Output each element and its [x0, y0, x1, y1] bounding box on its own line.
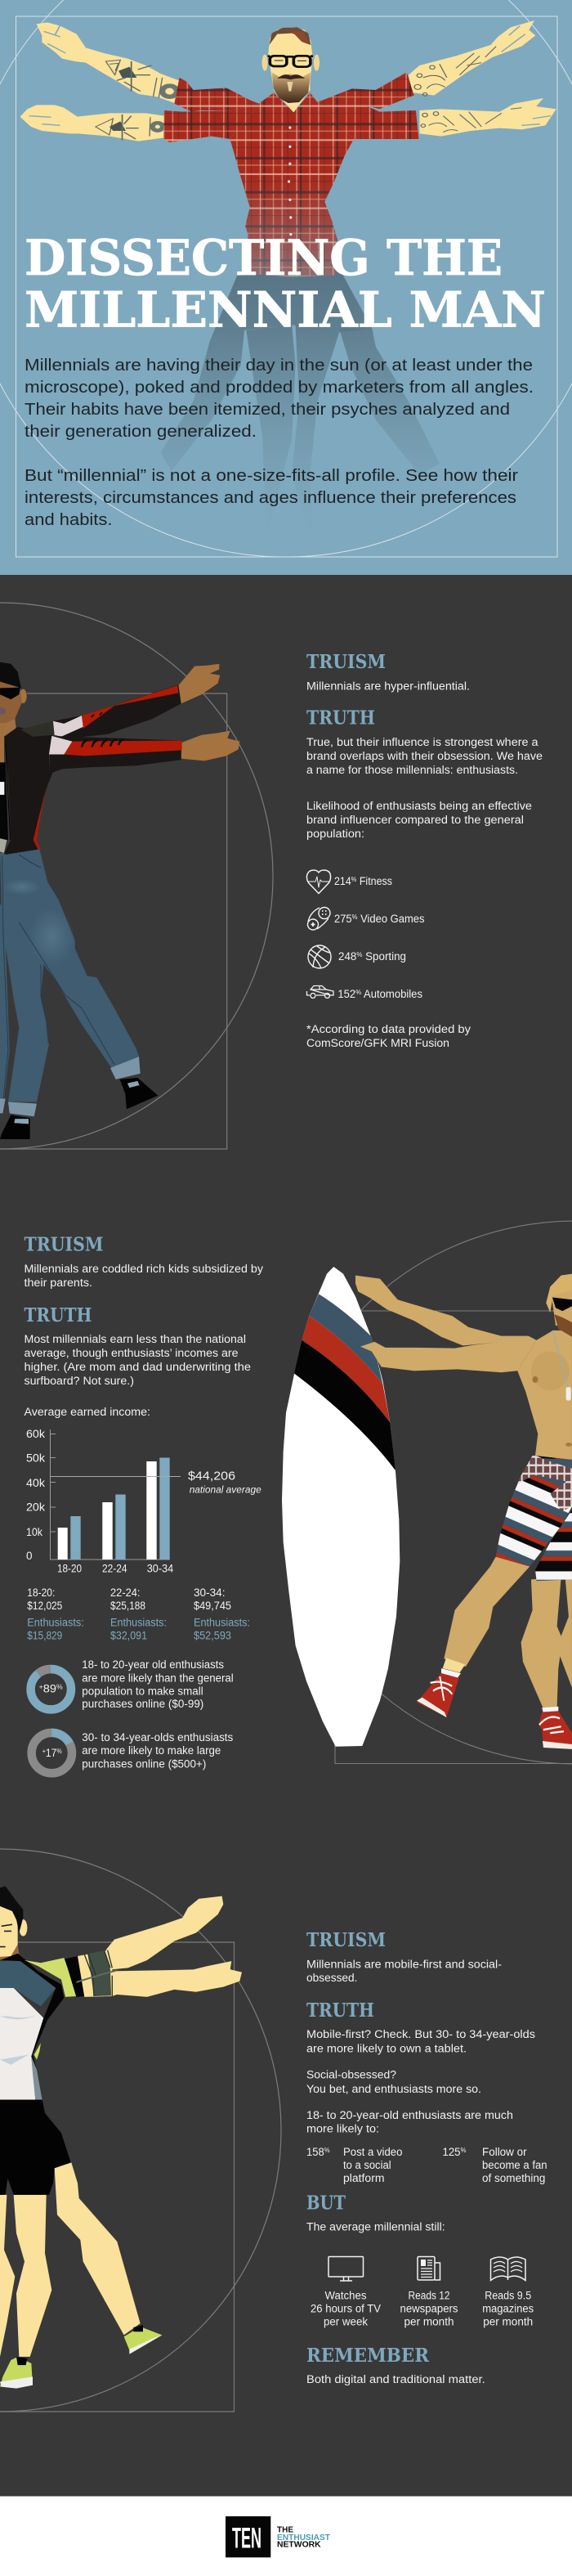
truism text — [25, 1263, 263, 1289]
jeans — [0, 849, 139, 1102]
income column: 30-34: 30-34: — [194, 1586, 226, 1599]
logo: The Enthusiast Network wordmark: THE — [277, 2526, 293, 2535]
icon: television — [328, 2257, 363, 2281]
jersey — [0, 1954, 78, 2100]
stat: sporting: Sporting — [362, 950, 406, 963]
stat: 158 percent: % — [324, 2147, 330, 2154]
title: DISSECTING THE — [25, 230, 503, 287]
caption: television: Watches — [325, 2290, 367, 2301]
footer — [0, 2496, 572, 2576]
panel: income — [23, 1221, 572, 1773]
remember text: Both digital and traditional matter. — [306, 2373, 485, 2385]
truism text: obsessed. — [306, 1972, 358, 1984]
illustration: tattooed man in plaid shirt — [20, 20, 556, 276]
frame circle and square — [0, 1849, 281, 2412]
stat: 158 percent: to a social — [343, 2159, 391, 2171]
donut text: small purchases: population to make small — [82, 1685, 203, 1698]
income column: 22-24: $25,188 — [110, 1600, 145, 1612]
income column: 18-20: $12,025 — [27, 1600, 62, 1612]
national average label: national average — [190, 1483, 261, 1495]
income column: 18-20 — [27, 1586, 84, 1642]
surfboard — [282, 1267, 400, 1747]
caption: magazines: magazines — [482, 2303, 534, 2314]
jeans cuffs — [0, 1057, 141, 1116]
legs — [444, 1557, 572, 1708]
arms and hands — [106, 1896, 242, 1997]
national average label — [188, 1469, 261, 1495]
donut chart: 89 percent: % — [56, 1683, 63, 1691]
icon: heart with pulse — [306, 870, 331, 893]
axis labels: 40k — [26, 1477, 45, 1489]
truth text: 18- to 20-year-old enthusiasts are much — [306, 2109, 513, 2121]
stat: video games: % — [352, 913, 358, 921]
head with sunglasses and beard — [546, 1274, 572, 1337]
truth text: are more likely to own a tablet. — [306, 2043, 467, 2054]
upper sleeve — [20, 684, 181, 739]
head — [0, 1886, 27, 1960]
stat: fitness: % — [351, 876, 356, 883]
stat: video games: Video Games — [358, 913, 425, 925]
truism text: their parents. — [25, 1277, 92, 1289]
icon: open magazine — [490, 2257, 525, 2280]
caption: television — [311, 2290, 381, 2327]
stat: 158 percent — [306, 2146, 402, 2184]
but text: The average millennial still: — [306, 2221, 445, 2233]
head with glasses and beard — [262, 27, 320, 112]
shoes — [0, 1078, 158, 1139]
panel: enthusiasts influencers — [0, 603, 543, 1149]
logo: The Enthusiast Network wordmark: ENTHUSIAST — [277, 2533, 330, 2542]
axis labels: 0 — [26, 1550, 33, 1562]
income column: 18-20: 18-20: — [27, 1586, 55, 1599]
likelihood text: Likelihood of enthusiasts being an effective — [306, 800, 532, 812]
shirt buttons — [288, 126, 292, 236]
stat: sporting: % — [356, 951, 362, 958]
illustration: man in black jacket and jeans — [0, 662, 239, 1139]
heading: remember: REMEMBER — [306, 2345, 430, 2367]
truth text: higher. (Are mom and dad underwriting the — [25, 1361, 251, 1373]
truth text — [306, 2028, 535, 2134]
sock and red sneakers — [417, 1658, 572, 1749]
stat: 125 percent: 125 — [443, 2146, 461, 2158]
stat: 125 percent: % — [461, 2147, 466, 2154]
vitruvian circle and square frame — [0, 0, 572, 557]
footnote — [306, 1023, 471, 1049]
lower sleeve — [49, 736, 182, 774]
logo: The Enthusiast Network wordmark: NETWORK — [277, 2541, 321, 2550]
frame circle and square — [286, 1221, 572, 1764]
truism text — [306, 1958, 502, 1984]
donut text: large purchases: purchases online ($500+) — [82, 1758, 206, 1770]
stat: 158 percent: platform — [343, 2172, 384, 2184]
intro text: interests, circumstances and ages influence their preferences — [25, 489, 516, 507]
axis labels: 22-24 — [102, 1562, 127, 1575]
icon: newspaper — [418, 2257, 440, 2280]
truth text: a name for those millennials: enthusiasts. — [306, 764, 518, 776]
stat: video games: 275 — [334, 913, 353, 925]
caption: magazines: per month — [483, 2316, 533, 2327]
stat: fitness: 214 — [334, 875, 353, 887]
income column: 18-20: $15,829 — [27, 1629, 62, 1642]
striped shorts — [496, 1456, 572, 1581]
chart axes — [51, 1429, 170, 1560]
income column: 22-24: $32,091 — [110, 1629, 147, 1642]
intro text: Millennials are having their day in the sun (or at least under the — [25, 357, 533, 375]
stat: 125 percent: of something — [482, 2172, 545, 2184]
bar chart: average earned income — [26, 1428, 261, 1575]
legs — [0, 2162, 141, 2357]
finger gaps — [29, 22, 551, 125]
footnote: *According to data provided by — [306, 1023, 471, 1035]
truism text: Millennials are coddled rich kids subsidized by — [25, 1263, 263, 1275]
national average line — [51, 1475, 181, 1477]
stat: 158 percent: 158 — [306, 2146, 325, 2158]
income column: 22-24 — [110, 1586, 167, 1642]
intro text: their generation generalized. — [25, 423, 257, 441]
tattoos — [96, 47, 521, 141]
truth text: Mobile-first? Check. But 30- to 34-year-olds — [306, 2028, 535, 2040]
chest detail and dog tag — [531, 1331, 572, 1447]
income column: 22-24: 22-24: — [110, 1586, 141, 1599]
plaid shirt — [163, 72, 418, 276]
icon: game controller — [307, 908, 330, 930]
income column: 30-34: Enthusiasts: — [194, 1616, 250, 1629]
caption: newspapers: Reads 12 — [409, 2290, 449, 2301]
truth text: average, though enthusiasts’ incomes are — [25, 1347, 239, 1359]
logo: TEN mark — [226, 2516, 270, 2557]
donut chart: 17 percent: % — [56, 1748, 62, 1755]
caption: television: per week — [324, 2316, 368, 2327]
income column: 30-34 — [194, 1586, 250, 1642]
donut chart: 17 percent: 17 — [46, 1747, 56, 1759]
donut chart: 89 percent: + — [39, 1683, 43, 1691]
heading: truism: TRUISM — [25, 1233, 103, 1256]
heading: but: BUT — [306, 2192, 346, 2215]
intro text — [25, 357, 534, 529]
truth text: True, but their influence is strongest where a — [306, 736, 538, 748]
logo: The Enthusiast Network wordmark — [277, 2526, 330, 2550]
title — [25, 230, 546, 339]
stat: automobiles: 152 — [337, 988, 356, 1000]
caption: newspapers: newspapers — [400, 2303, 458, 2314]
caption: newspapers: per month — [404, 2316, 454, 2327]
lime sneakers — [0, 2325, 162, 2389]
heading: truth: TRUTH — [25, 1304, 92, 1326]
intro text: Their habits have been itemized, their psyches analyzed and — [25, 401, 510, 419]
truth text: more likely to: — [306, 2123, 379, 2134]
jacket — [0, 727, 53, 855]
truth text — [25, 1333, 251, 1387]
donut text: small purchases: 18- to 20-year old enthusiasts — [82, 1658, 224, 1671]
truth text: You bet, and enthusiasts more so. — [306, 2083, 481, 2095]
likelihood text: population: — [306, 828, 364, 840]
national average label: $44,206 — [188, 1469, 235, 1483]
stat: 125 percent: Follow or — [482, 2146, 527, 2158]
donut chart: 89 percent — [23, 1661, 79, 1717]
caption: magazines — [482, 2290, 534, 2327]
truth text: surfboard? Not sure.) — [25, 1375, 134, 1387]
donut text: large purchases — [82, 1731, 234, 1770]
heading: truth: TRUTH — [306, 1999, 374, 2022]
donut text: small purchases — [82, 1658, 234, 1710]
frame circle and square — [0, 603, 273, 1149]
axis labels: 30-34 — [147, 1562, 174, 1575]
truth text: Social-obsessed? — [306, 2069, 396, 2080]
axis labels: 60k — [26, 1428, 45, 1440]
intro text: microscope), poked and prodded by marketers from all angles. — [25, 379, 534, 397]
truth text: Most millennials earn less than the national — [25, 1333, 246, 1345]
stat: 125 percent — [443, 2146, 547, 2184]
head — [0, 662, 27, 762]
title: MILLENNIAL MAN — [25, 281, 546, 339]
caption: television: 26 hours of TV — [311, 2303, 381, 2314]
black shorts — [0, 2100, 71, 2195]
arms — [20, 20, 556, 141]
income column: 30-34: $52,593 — [194, 1629, 231, 1642]
axis labels: 10k — [26, 1526, 42, 1538]
likelihood text: brand influencer compared to the general — [306, 814, 524, 826]
truth text — [306, 736, 543, 776]
bars: general population — [58, 1461, 157, 1560]
heading: truism: TRUISM — [306, 1929, 386, 1951]
axis labels — [26, 1428, 174, 1575]
chart heading: Average earned income: — [25, 1406, 150, 1418]
hands — [178, 664, 239, 761]
logo: TEN mark: TEN — [232, 2523, 261, 2555]
panel: hero introduction — [0, 0, 572, 575]
income column: 18-20: Enthusiasts: — [27, 1616, 84, 1629]
donut chart: 89 percent: 89 — [43, 1683, 56, 1694]
donut chart: 17 percent — [32, 1733, 72, 1773]
bars: enthusiasts — [70, 1457, 170, 1560]
stat: fitness: Fitness — [356, 875, 392, 887]
faded legs — [160, 268, 440, 548]
donut text: large purchases: 30- to 34-year-olds enthusiasts — [82, 1731, 234, 1744]
intro text: But “millennial” is not a one-size-fits-all profile. See how their — [25, 467, 518, 485]
stat: sporting: 248 — [338, 950, 357, 963]
banded sleeve — [65, 1950, 117, 1997]
likelihood text — [306, 800, 532, 840]
donut text: large purchases: are more likely to make large — [82, 1744, 221, 1757]
heading: truism: TRUISM — [306, 651, 386, 673]
donut text: small purchases: purchases online ($0-99) — [82, 1698, 203, 1710]
donut text: small purchases: are more likely than the general — [82, 1672, 234, 1685]
truism text: Millennials are mobile-first and social- — [306, 1958, 502, 1971]
illustration: surfer with surfboard — [282, 1267, 572, 1749]
axis labels: 18-20 — [57, 1562, 82, 1575]
stat: automobiles: Automobiles — [361, 988, 422, 1000]
intro text: and habits. — [25, 511, 113, 529]
footnote: ComScore/GFK MRI Fusion — [306, 1037, 449, 1049]
stat: 158 percent: Post a video — [343, 2146, 402, 2158]
donut chart: 17 percent: + — [42, 1748, 46, 1755]
truism text: Millennials are hyper-influential. — [306, 680, 470, 692]
income column: 30-34: $49,745 — [194, 1600, 231, 1612]
caption: newspapers — [400, 2290, 458, 2327]
axis labels: 50k — [26, 1452, 45, 1464]
illustration: cyclist in lime and black — [0, 1886, 242, 2389]
icon: car — [307, 986, 333, 998]
truth text: brand overlaps with their obsession. We have — [306, 750, 543, 762]
caption: magazines: Reads 9.5 — [485, 2290, 531, 2301]
stat: automobiles: % — [355, 989, 361, 996]
heading: truth: TRUTH — [306, 707, 375, 729]
axis labels: 20k — [26, 1501, 45, 1513]
income column: 22-24: Enthusiasts: — [110, 1616, 167, 1629]
panel: mobile and social — [0, 1849, 547, 2412]
icon: basketball — [308, 945, 331, 968]
stat: 125 percent: become a fan — [482, 2159, 547, 2171]
torso and arms — [355, 1276, 572, 1460]
